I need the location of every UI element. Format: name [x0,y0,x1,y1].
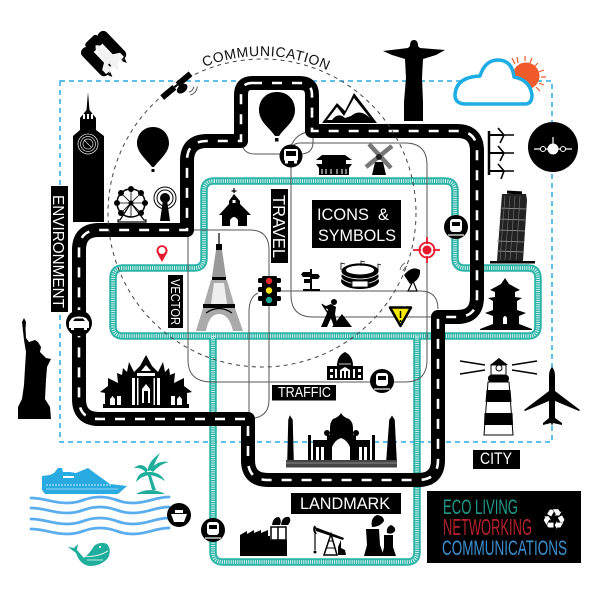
label: environment: ENVIRONMENT [49,195,66,309]
panel: eco box: ♻ [541,503,567,536]
icon: train badge bottom [201,518,225,542]
icon: cruise ship [42,468,127,494]
icon: hot air balloon left [137,127,169,172]
icon: sun [512,56,546,91]
icon: Christ the Redeemer [383,40,445,121]
icon: traffic light [258,276,281,306]
thin route lines [187,131,438,420]
icon: satellite dish [400,263,420,291]
icon: red target [413,237,440,263]
icon: bus badge [280,144,302,168]
panel: eco box [427,491,581,563]
icon: Eiffel tower [196,233,243,331]
road loop [79,83,477,480]
icon: chinese pavilion [480,278,532,330]
blue dashed frame [60,81,552,442]
icon: space shuttle [77,27,132,82]
icon: thai temple [100,355,192,408]
icon: palm tree [134,453,169,494]
communication orbit [108,59,416,367]
icon: cooling towers [364,515,396,556]
icon: signpost [301,269,320,291]
heading: communication: COMMUNICATION [202,46,330,70]
icon: taj mahal [286,413,397,468]
icon: train badge right [444,215,468,239]
icon: capitol building [327,348,363,380]
icon: lighthouse [460,358,537,435]
icon: hot air balloon top [259,92,295,142]
icon: leaning tower of Pisa [490,191,535,264]
icon: warning sign [390,308,411,326]
icon: windmill [366,144,392,175]
label: icons and symbols [312,200,401,248]
icon: Big Ben [73,92,104,222]
icon: ship badge [167,503,191,527]
label: traffic: TRAFFIC [278,385,331,401]
icon: ferris wheel [114,186,148,222]
icon: road worker [321,299,352,327]
icon: oil pump [314,526,346,555]
label: icons and symbols: ICONS & [317,205,390,224]
icon: statue of liberty [18,318,51,419]
icon: map pin [156,245,168,262]
icon: airplane [524,367,580,426]
railway network [113,181,538,562]
icon: factory [240,517,290,556]
icon: car badge [66,310,92,336]
label: city: CITY [480,450,512,468]
panel: eco box: NETWORKING [443,514,532,540]
icon: wind turbines [489,128,514,179]
icon: cloud [455,60,532,104]
icon: mountains [322,93,377,123]
icon: asian gate temple [316,155,352,175]
icon: train badge centre [370,369,394,393]
icon: radio antenna [154,187,176,221]
icon: stadium [341,261,381,289]
label: vector: VECTOR [168,279,182,325]
label: travel: TRAVEL [269,195,289,258]
panel: eco box: ECO LIVING [443,496,518,519]
icon: church [219,188,251,226]
label: icons and symbols: SYMBOLS [318,226,396,245]
icon: satellite [160,71,202,111]
waves [31,497,169,534]
icon: airplane badge [528,122,578,172]
icon: whale [68,543,110,566]
label: landmark: LANDMARK [300,495,390,513]
